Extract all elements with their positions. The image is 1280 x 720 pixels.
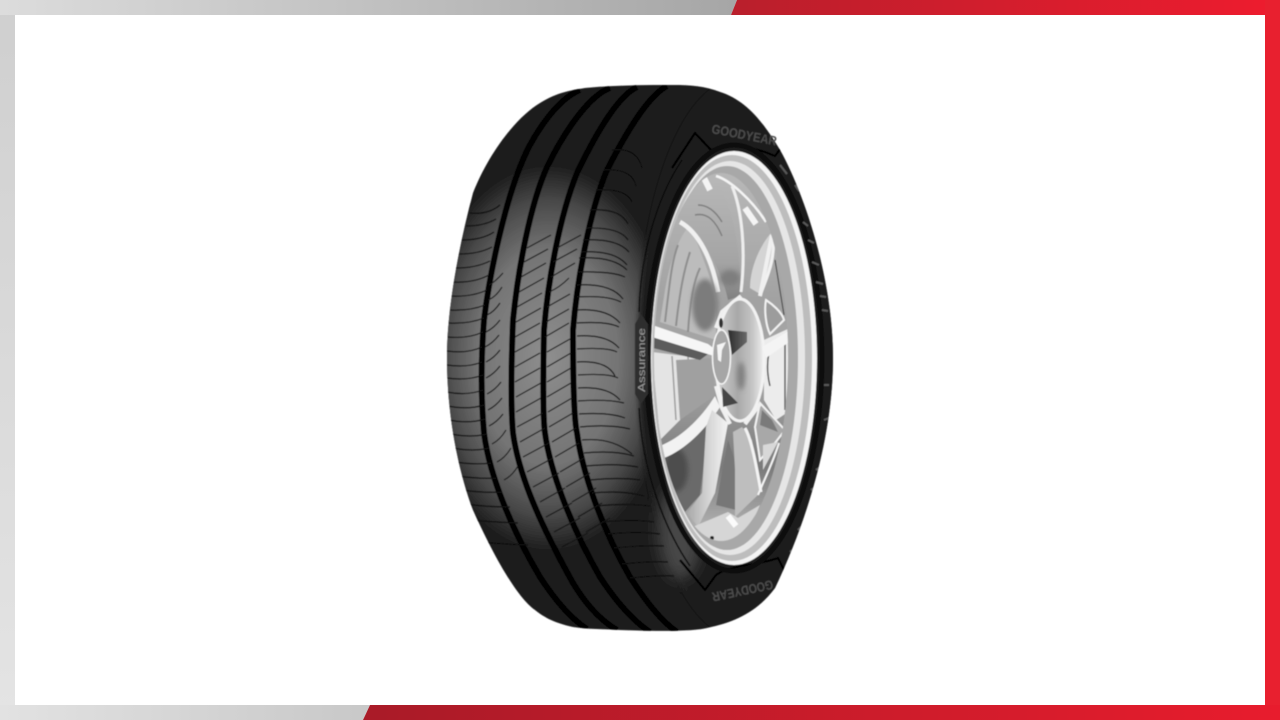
badge: Assurance plaque: Assurance [637,327,648,392]
gap between lower spokes [716,442,736,510]
wheel [651,151,817,565]
spoke: upper left highlight [680,222,718,292]
hub wedge lower [722,387,738,407]
hub wedge upper [728,330,747,355]
groove 2 [512,88,617,630]
slits right of hub [768,340,789,410]
left lower barrel [654,352,696,439]
rim band [652,155,812,561]
light area right of hub [764,328,790,420]
spoke: lower right [755,403,785,460]
hub centre logo [717,342,726,362]
label: GOODYEAR top: GOODYEAR [710,121,779,149]
window upper right of hub [765,300,784,334]
barrel: upper left [660,225,716,340]
spoke: right [762,327,795,358]
rim face [654,173,788,541]
groove 4 [573,86,677,632]
tyre body [420,80,840,640]
sidewall marking dashes [780,165,829,552]
label: GOODYEAR bottom: GOODYEAR [710,577,774,605]
sidewall [638,82,836,634]
left shoulder sipes [447,205,528,545]
tyre illustration [420,80,840,640]
sidewall lower glow [658,480,702,580]
tread sheen [446,165,649,548]
bottom barrel with bolts [694,505,760,542]
groove 3 [543,87,650,632]
badge: Assurance plaque [635,314,648,404]
dark gap lower left [666,427,706,512]
spoke: lower centre left [687,410,728,527]
rim outer lip [651,151,817,565]
right shoulder sipes [577,150,674,578]
hub cup [716,299,764,421]
sidewall inner rim shadow [646,145,822,571]
spoke: top, right edge [732,186,743,292]
spoke: top, back face [718,266,740,300]
centre rib sipes [485,235,610,547]
spoke: left [652,325,716,356]
sidewall bead panel lines [672,133,785,590]
hub star web [716,235,772,424]
hub centre cap [712,330,730,384]
hub bolt hole [719,318,723,328]
groove 1 [482,90,587,629]
spoke: upper right [750,232,773,294]
spoke: lower left [660,396,720,458]
sidewall inner vertical line [639,160,690,566]
shadow below left spoke [653,337,708,360]
spoke: lower centre right [733,427,760,517]
hub band shade [737,362,745,390]
upper rim highlight [716,176,766,222]
